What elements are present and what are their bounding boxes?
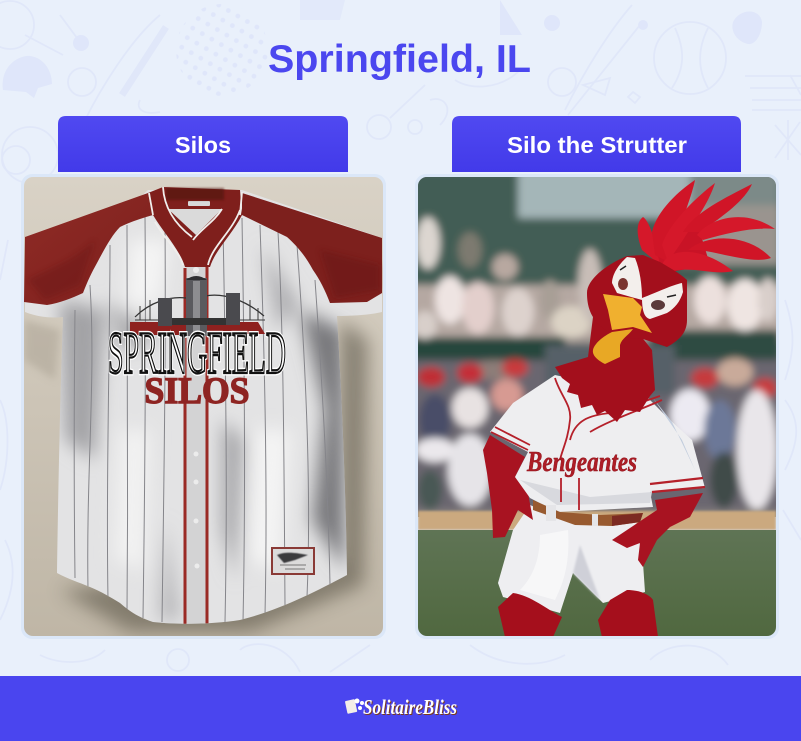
pinstripes bbox=[74, 215, 330, 622]
icon: cards bbox=[345, 698, 364, 714]
mascot comb bbox=[638, 180, 775, 272]
tab heading: Silo the Strutter bbox=[452, 116, 741, 172]
image frame bbox=[21, 174, 386, 639]
mascot head bbox=[587, 255, 687, 347]
collar inner bbox=[168, 209, 222, 235]
image frame bbox=[415, 174, 779, 639]
stadium background bbox=[410, 170, 790, 638]
collar piping bbox=[149, 187, 242, 265]
tab heading: Silos: Silos bbox=[175, 132, 231, 158]
illustration: jersey: SPRINGFIELD bbox=[108, 320, 286, 386]
crowd upper bbox=[416, 217, 440, 269]
grass bbox=[418, 530, 776, 638]
mascot beak bbox=[593, 294, 652, 364]
infield dirt bbox=[418, 511, 776, 530]
left sleeve bbox=[24, 193, 153, 305]
right sleeve bbox=[242, 193, 382, 303]
tab heading: Silo the Strutter: Silo the Strutter bbox=[507, 132, 687, 158]
footer logo: SolitaireBliss bbox=[364, 696, 458, 720]
jersey wordmark bbox=[108, 330, 286, 404]
panel: Silos bbox=[21, 116, 386, 639]
belt bbox=[533, 500, 643, 526]
footer band bbox=[0, 676, 801, 741]
jersey trim bbox=[491, 378, 705, 510]
jersey tag bbox=[271, 547, 315, 575]
silo logo bbox=[130, 276, 265, 336]
mascot neck feathers bbox=[555, 317, 655, 422]
jersey wordmark: SILOS bbox=[144, 371, 250, 412]
title: Springfield, IL bbox=[268, 38, 531, 81]
footer logo bbox=[345, 695, 458, 720]
illustration: jersey bbox=[24, 177, 384, 636]
tab heading: Silos bbox=[58, 116, 348, 172]
illustration: jersey: SPRINGFIELD bbox=[108, 320, 286, 386]
mascot jersey bbox=[490, 375, 705, 526]
illustration: mascot bbox=[410, 170, 790, 638]
mascot eyes bbox=[612, 257, 683, 319]
jersey shadow bbox=[60, 320, 368, 632]
mascot arms bbox=[483, 435, 703, 567]
mascot socks bbox=[498, 590, 658, 637]
buttons bbox=[193, 267, 200, 568]
crowd lower bbox=[473, 360, 517, 380]
mascot pants bbox=[498, 505, 645, 613]
placket bbox=[186, 262, 206, 627]
panel: Silo the Strutter bbox=[410, 116, 790, 639]
jersey body bbox=[24, 180, 384, 630]
jersey script: Bengeantes bbox=[526, 447, 637, 478]
fabric folds bbox=[60, 240, 345, 620]
collar bbox=[148, 187, 242, 267]
footer logo: SolitaireBliss bbox=[363, 695, 457, 719]
